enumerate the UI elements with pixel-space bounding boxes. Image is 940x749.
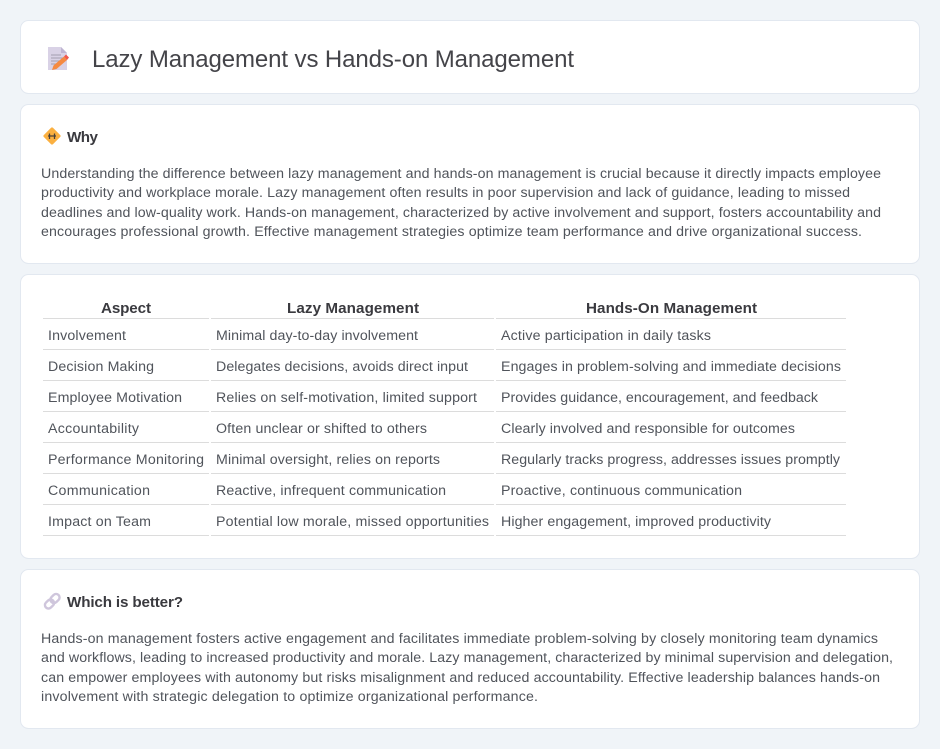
row: employee motivation: Employee Motivation bbox=[48, 390, 182, 406]
row: employee motivation: Provides guidance, encouragement, and feedback bbox=[501, 390, 819, 406]
text block: verdict bbox=[41, 631, 893, 705]
row: impact on team: Higher engagement, improved productivity bbox=[501, 514, 772, 530]
text block: verdict: can empower employees with autonomy but risks misalignment and reduced accountability. Effective leadership balances hands-on bbox=[41, 670, 880, 686]
title: Lazy Management vs Hands-on Management bbox=[92, 46, 574, 73]
panel: title header bbox=[20, 20, 920, 94]
row: communication: Communication bbox=[48, 483, 150, 499]
row: accountability bbox=[48, 421, 795, 437]
text block: verdict: Hands-on management fosters active engagement and facilitates immediate problem-solving by closely monitoring team dynamics bbox=[41, 631, 878, 647]
row: communication: Proactive, continuous communication bbox=[501, 483, 742, 499]
row: accountability: Often unclear or shifted to others bbox=[216, 421, 427, 437]
row: accountability: Accountability bbox=[48, 421, 140, 437]
text block: why explanation: deadlines and low-quality work. Hands-on management, characterized by active involvement and support, fosters accountability and bbox=[41, 205, 881, 221]
table header: Hands-On Management bbox=[586, 300, 757, 317]
text block: why explanation bbox=[41, 166, 881, 240]
table header: Aspect bbox=[101, 300, 151, 317]
icon: chain link bbox=[43, 592, 61, 610]
row: performance monitoring: Regularly tracks progress, addresses issues promptly bbox=[501, 452, 841, 468]
text block: why explanation: Understanding the difference between lazy management and hands-on management is crucial because it directly impacts employee bbox=[41, 166, 881, 182]
row: performance monitoring: Minimal oversight, relies on reports bbox=[216, 452, 440, 468]
row: employee motivation bbox=[48, 390, 819, 406]
text block: verdict: involvement with strategic delegation to optimize organizational performance. bbox=[41, 689, 538, 705]
row: decision making: Decision Making bbox=[48, 359, 154, 375]
text block: verdict: and workflows, leading to increased productivity and morale. Lazy management, characterized by minimal supervision and delegation, bbox=[41, 650, 893, 666]
row: performance monitoring: Performance Monitoring bbox=[48, 452, 204, 468]
panel: comparison table bbox=[20, 274, 920, 558]
text block: why explanation: productivity and workplace morale. Lazy management often results in poor supervision and lack of guidance, leading to missed bbox=[41, 185, 850, 201]
table header: Lazy Management bbox=[287, 300, 419, 317]
panel: which is better bbox=[20, 570, 920, 728]
row: impact on team bbox=[48, 514, 772, 530]
row: impact on team: Impact on Team bbox=[48, 514, 151, 530]
row: involvement bbox=[48, 328, 711, 344]
table header bbox=[101, 300, 757, 317]
row: performance monitoring bbox=[48, 452, 841, 468]
row: communication: Reactive, infrequent communication bbox=[216, 483, 446, 499]
text block: why explanation: encourages professional growth. Effective management strategies optimize team performance and drive organizational success. bbox=[41, 224, 862, 240]
heading: why: Why bbox=[67, 129, 99, 146]
row: employee motivation: Relies on self-motivation, limited support bbox=[216, 390, 477, 406]
row: involvement: Involvement bbox=[48, 328, 126, 344]
row: communication bbox=[48, 483, 742, 499]
row: involvement: Active participation in daily tasks bbox=[501, 328, 711, 344]
row: impact on team: Potential low morale, missed opportunities bbox=[216, 514, 489, 530]
icon: diamond sign bbox=[43, 127, 61, 145]
icon: document with pencil bbox=[48, 47, 69, 70]
row: involvement: Minimal day-to-day involvement bbox=[216, 328, 418, 344]
panel: why bbox=[20, 104, 920, 264]
row: decision making: Engages in problem-solving and immediate decisions bbox=[501, 359, 841, 375]
row: decision making bbox=[48, 359, 841, 375]
heading: which is better: Which is better? bbox=[67, 594, 183, 611]
row: accountability: Clearly involved and responsible for outcomes bbox=[501, 421, 795, 437]
row: decision making: Delegates decisions, avoids direct input bbox=[216, 359, 468, 375]
